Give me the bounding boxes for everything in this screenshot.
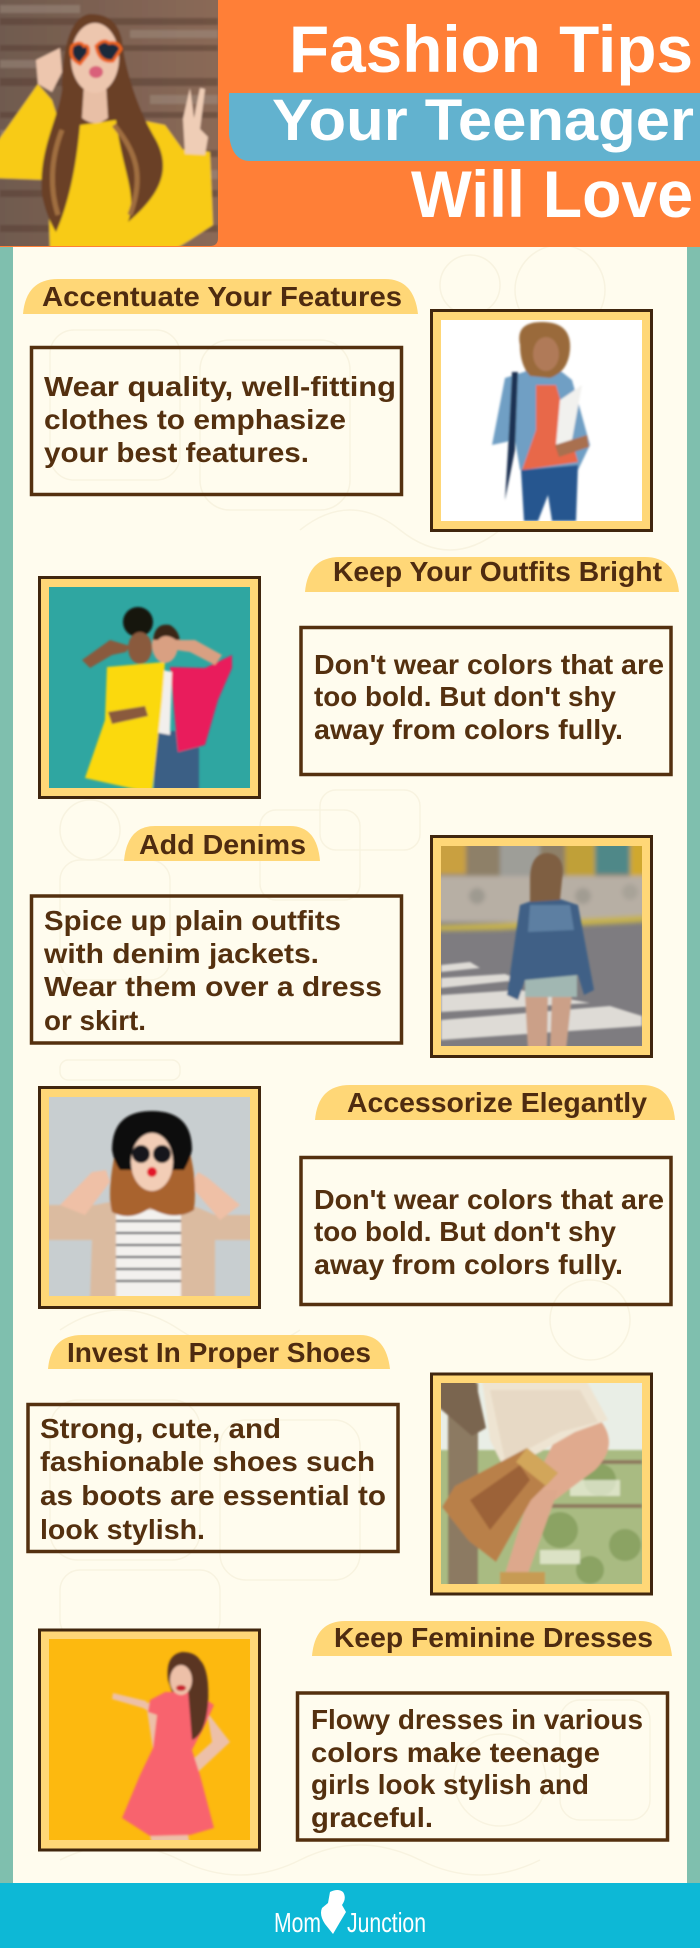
text box: girls look stylish and bbox=[311, 1769, 589, 1800]
photo frame bbox=[40, 1088, 260, 1308]
text box: Strong, cute, and bbox=[40, 1413, 281, 1444]
photo frame bbox=[432, 1374, 652, 1594]
text box: as boots are essential to bbox=[40, 1480, 386, 1511]
title: Your Teenager bbox=[272, 88, 694, 153]
photo frame bbox=[40, 1630, 260, 1850]
text box: clothes to emphasize bbox=[44, 404, 346, 435]
text box: graceful. bbox=[311, 1802, 433, 1833]
text box bbox=[28, 1404, 398, 1552]
text box: Wear quality, well-fitting bbox=[44, 371, 396, 402]
side band: right bbox=[687, 246, 700, 1883]
text box: away from colors fully. bbox=[314, 714, 623, 745]
title: Fashion Tips bbox=[289, 12, 693, 86]
icon: mother and child heart bbox=[321, 1890, 346, 1934]
text box: Spice up plain outfits bbox=[44, 905, 341, 936]
footer band bbox=[0, 1883, 700, 1948]
text box: look stylish. bbox=[40, 1514, 205, 1545]
heading tab: Keep Feminine Dresses bbox=[334, 1622, 653, 1653]
section 2: Keep Your Outfits Bright bbox=[40, 556, 679, 798]
text box bbox=[301, 628, 671, 774]
text box: your best features. bbox=[44, 437, 309, 468]
photo frame bbox=[432, 310, 652, 530]
title: Will Love bbox=[411, 157, 693, 231]
side band: left bbox=[0, 246, 13, 1883]
text box bbox=[32, 348, 402, 494]
text box: Wear them over a dress bbox=[44, 971, 382, 1002]
section 1: Accentuate Your Features bbox=[23, 279, 652, 530]
section 6: Keep Feminine Dresses bbox=[40, 1621, 672, 1850]
text box: or skirt. bbox=[44, 1005, 146, 1036]
text box bbox=[301, 1158, 671, 1304]
title bbox=[272, 12, 694, 231]
MomJunction logo: Junction bbox=[347, 1907, 426, 1938]
text box: Flowy dresses in various bbox=[311, 1704, 643, 1735]
photo frame bbox=[432, 836, 652, 1056]
header banner bbox=[0, 0, 700, 251]
text box: too bold. But don't shy bbox=[314, 1216, 616, 1247]
MomJunction logo: Mom bbox=[274, 1907, 321, 1938]
MomJunction logo bbox=[274, 1890, 426, 1938]
heading tab: Accentuate Your Features bbox=[42, 281, 402, 312]
title banner blue bbox=[229, 93, 700, 161]
text box: with denim jackets. bbox=[43, 938, 319, 969]
text box: fashionable shoes such bbox=[40, 1446, 375, 1477]
text box bbox=[32, 896, 402, 1043]
heading tab: Invest In Proper Shoes bbox=[67, 1337, 371, 1368]
text box: Don't wear colors that are bbox=[314, 1184, 664, 1215]
header orange panel bbox=[0, 0, 700, 247]
header photo: girl in yellow sweater with heart sunglasses bbox=[0, 0, 225, 251]
text box: Don't wear colors that are bbox=[314, 649, 664, 680]
text box bbox=[298, 1693, 668, 1840]
section 4: Accessorize Elegantly bbox=[40, 1085, 675, 1308]
text box: too bold. But don't shy bbox=[314, 681, 616, 712]
heading tab: Add Denims bbox=[139, 829, 306, 860]
heading tab: Accessorize Elegantly bbox=[347, 1087, 648, 1118]
section 3: Add Denims bbox=[32, 826, 652, 1056]
text box: away from colors fully. bbox=[314, 1249, 623, 1280]
text box: colors make teenage bbox=[311, 1737, 600, 1768]
heading tab: Keep Your Outfits Bright bbox=[333, 556, 662, 587]
section 5: Invest In Proper Shoes bbox=[28, 1335, 652, 1594]
photo frame bbox=[40, 578, 260, 798]
